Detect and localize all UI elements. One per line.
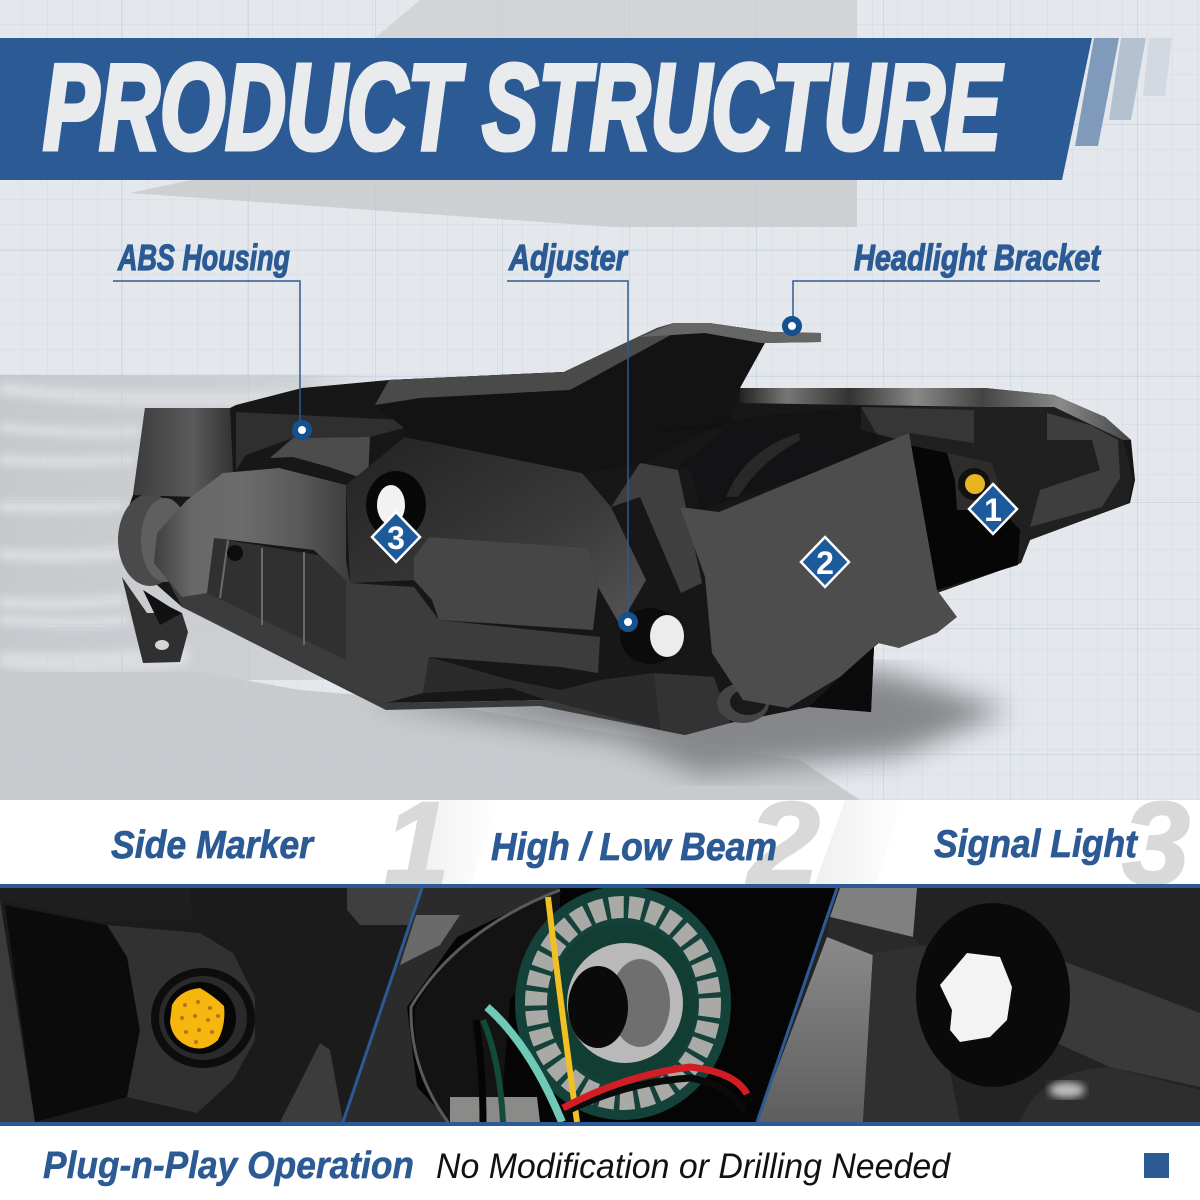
label: High / Low Beam: High / Low Beam [491, 826, 777, 869]
marker 2 [801, 537, 849, 587]
photo frame lines [0, 884, 1200, 1126]
footer: Plug-n-Play Operation: Plug-n-Play Operation [43, 1145, 414, 1187]
footer [0, 1126, 1200, 1200]
ghost number 1: 1 [384, 778, 450, 910]
feature labels band [0, 778, 1200, 910]
lower body panels [157, 538, 600, 703]
high and low beam cap [678, 428, 850, 497]
label: Side Marker: Side Marker [111, 824, 315, 867]
white opening [940, 953, 1012, 1042]
lower rear connector [809, 647, 874, 712]
detail photo: signal light [755, 888, 1200, 1122]
upper cover [375, 323, 771, 473]
callout: ABS Housing: ABS Housing [117, 237, 290, 278]
white adjuster screw [620, 608, 684, 664]
callout: Headlight Bracket [785, 237, 1102, 333]
title banner [0, 38, 1172, 180]
lower left mount bracket [122, 577, 188, 663]
metal bulb collar [567, 943, 683, 1063]
label: Signal Light: Signal Light [934, 823, 1139, 866]
amber bulb [170, 988, 224, 1048]
center dark surface [346, 437, 646, 625]
callout: Headlight Bracket: Headlight Bracket [854, 237, 1102, 278]
raised front body surface [154, 468, 346, 597]
main silhouette [118, 323, 1135, 735]
marker 3: 3 [387, 520, 405, 556]
bulb ring [151, 968, 255, 1068]
textured foam cover [680, 433, 957, 708]
signal light opening [366, 471, 426, 539]
left round socket [118, 494, 189, 586]
footer: No Modification or Drilling Needed: No Modification or Drilling Needed [436, 1147, 951, 1186]
center wedge [611, 463, 702, 593]
headlight housing illustration [118, 323, 1135, 735]
detail photo: high and low beam socket [340, 886, 840, 1122]
lower center block [654, 673, 730, 735]
callout: ABS Housing [113, 237, 309, 437]
callout: Adjuster [507, 237, 635, 629]
mounting plate [107, 925, 255, 1113]
marker plate [947, 453, 1002, 510]
marker 2: 2 [816, 545, 834, 581]
callout: Adjuster: Adjuster [508, 237, 629, 278]
ghost number 3: 3 [1122, 778, 1190, 910]
marker 1: 1 [984, 492, 1002, 528]
lamp drop shadow [360, 670, 1010, 775]
background: grid paper with ghosted car [0, 0, 1200, 800]
right body panel [414, 537, 598, 630]
left end block [133, 408, 233, 497]
wires [548, 897, 577, 1122]
ghost number 2: 2 [746, 778, 820, 910]
bottom strip [423, 657, 660, 730]
marker 1 [969, 484, 1017, 534]
marker 3 [372, 512, 420, 562]
side marker bulb [958, 468, 990, 500]
black socket ring [916, 903, 1070, 1087]
rear rim and outer shell [740, 388, 1131, 440]
upper shoulder [236, 412, 404, 470]
footer square [1144, 1153, 1169, 1178]
banner accent stripes [1075, 38, 1172, 146]
detail photo: side marker [0, 888, 430, 1122]
green circuit ring [515, 886, 731, 1120]
